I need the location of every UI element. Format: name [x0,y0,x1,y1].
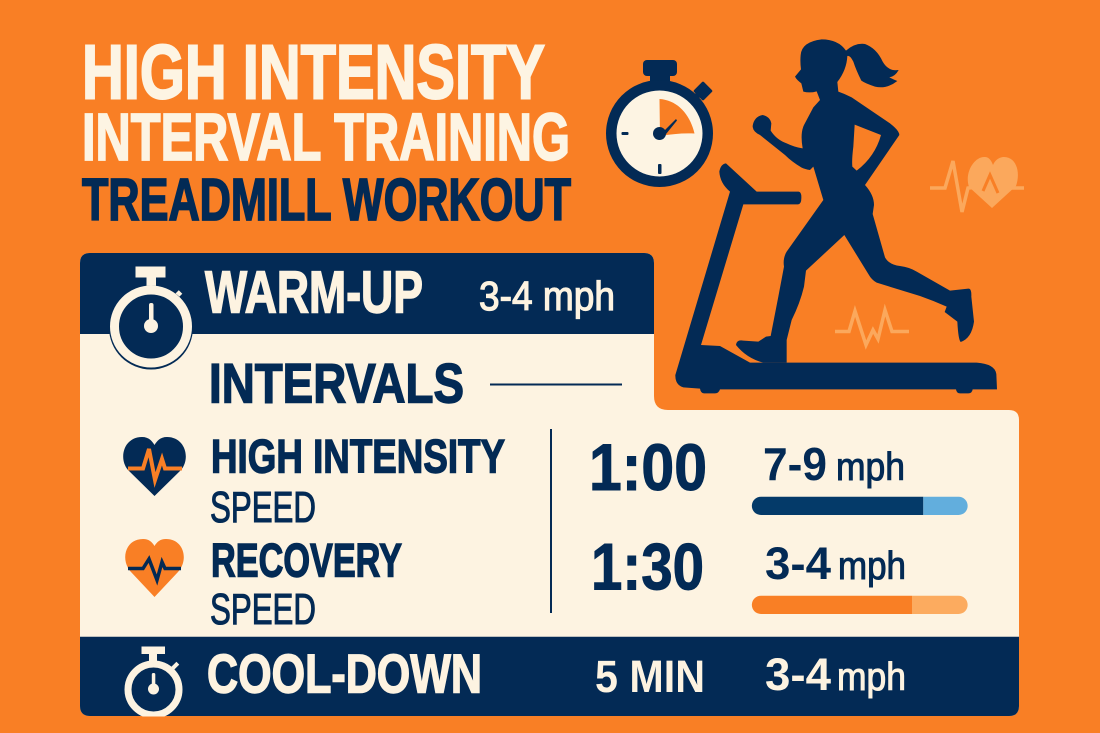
cool-down speed: 3-4 [765,649,831,700]
title line: high intensity: HIGH INTENSITY [82,30,545,116]
icon: faint pulse line [835,310,909,345]
icon: faint heartbeat with heart [930,157,1024,212]
cool-down speed unit: mph [837,656,906,699]
panel: cool-down footer [80,637,1019,716]
column divider [550,429,552,613]
high intensity speed: 7-9 [763,438,827,490]
icon: large stopwatch [606,60,713,187]
icon: cool-down stopwatch [128,646,179,715]
high intensity label [210,430,505,532]
warm-up label: WARM-UP [205,260,423,326]
icon: high intensity heart [123,437,186,496]
high intensity speed [763,438,905,490]
recovery label: RECOVERY [211,534,402,586]
recovery speed: mph [838,545,906,588]
intervals heading: INTERVALS [209,352,464,414]
recovery speed bar [752,596,968,614]
icon: warm-up stopwatch [109,266,193,370]
recovery label [210,534,402,634]
recovery time: 1:30 [591,530,704,604]
panel: warm-up header [80,253,654,334]
title line: interval training: INTERVAL TRAINING [82,100,570,175]
panel: workout card background [80,253,1019,716]
high intensity speed: mph [836,446,905,489]
high intensity speed bar [752,497,968,515]
cool-down label: COOL-DOWN [207,642,482,704]
speed sublabel: SPEED [210,483,316,532]
title [82,30,571,233]
icon: treadmill [675,163,997,393]
cool-down duration: 5 MIN [595,651,705,702]
icon: running woman silhouette [736,39,974,363]
recovery speed [765,538,906,589]
high intensity time: 1:00 [589,430,707,504]
high intensity label: HIGH INTENSITY [211,430,505,482]
warm-up speed: 3-4 mph [479,273,615,319]
recovery speed: 3-4 [765,538,831,589]
icon: recovery heart [125,539,184,597]
speed sublabel: SPEED [210,585,316,634]
title line: treadmill workout: TREADMILL WORKOUT [82,167,571,233]
